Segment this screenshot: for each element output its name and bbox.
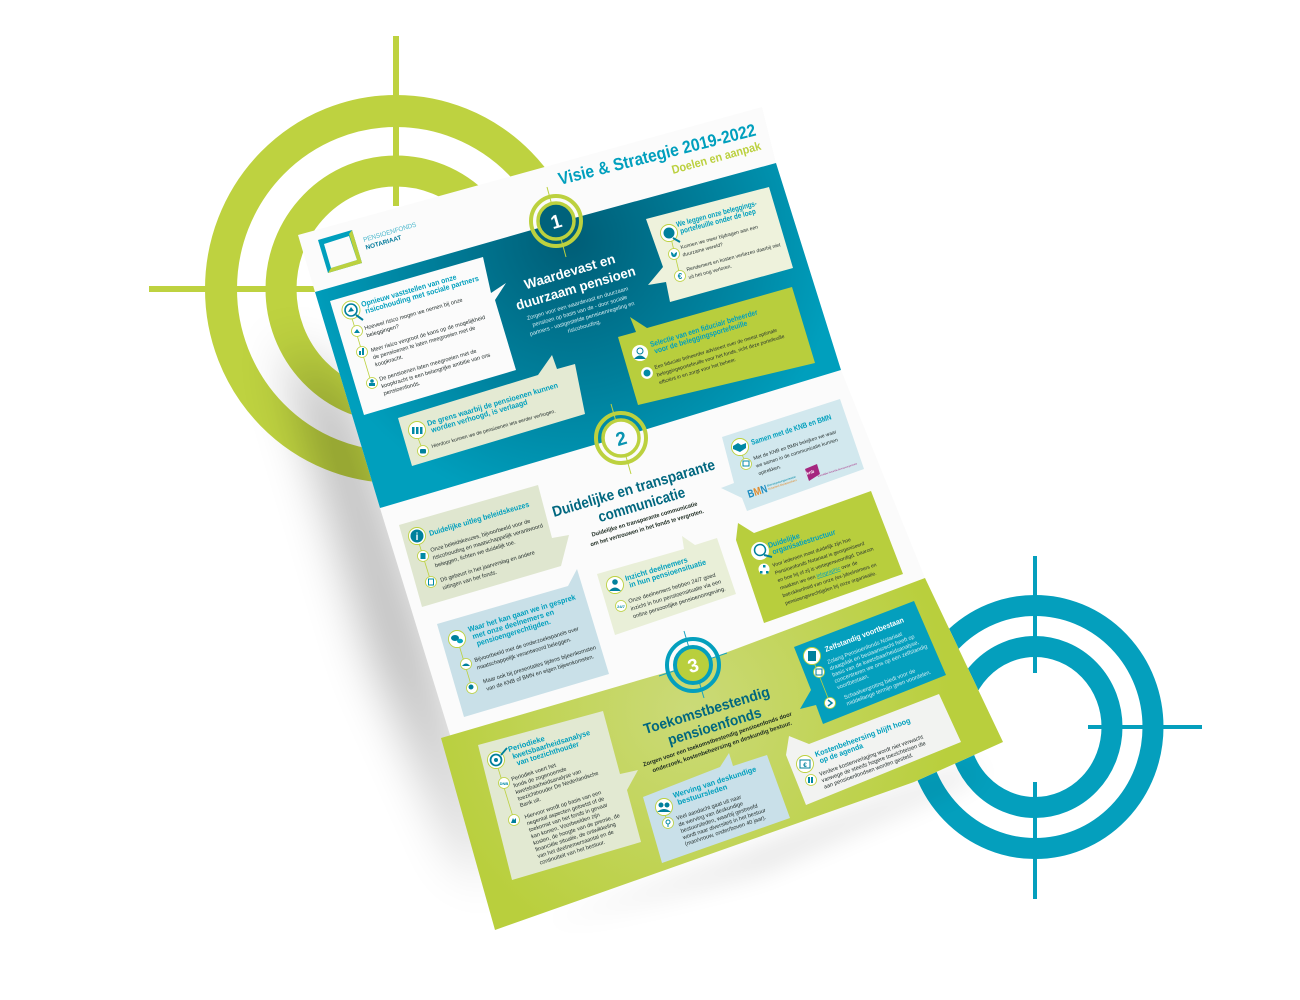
icon: org chart [758,564,770,574]
text: Voor iedereen moet duidelijk zijn hoe [772,537,852,569]
heading: kwetsbaarheidsanalyse [511,728,591,761]
text: Veel aandacht gaat uit naar [676,795,742,822]
logo: KNB [805,462,858,481]
text: bestuursleden, waarbij gestreefd [680,803,759,835]
heading: Werving van deskundige [672,764,757,800]
text: Maar ook bij presentaties tijdens bijeenkomsten [482,645,597,685]
icon: clipboard [814,666,824,678]
icon: DNB [498,778,510,788]
heading: Duidelijke uitleg beleidskeuzes [428,500,530,538]
text: efficiënt in en zorgt voor het beheer. [659,357,737,386]
panel: kostenbeheersing [786,694,961,805]
icon: info [408,528,426,544]
heading: Periodieke [507,734,546,754]
logo: PENSIOENFONDS [363,221,418,244]
heading: van toezichthouder [515,739,580,767]
section 1 intro: risicohouding. [567,319,602,335]
heading: Selectie van een fiduciair beheerder [649,308,759,349]
text: draagvlak en bestaansrecht heeft op [829,634,916,672]
logo: BMN: BMN [746,483,769,501]
icon: leaf [668,248,680,260]
icon: adviser [632,344,648,362]
text: aan pensioenfondsen worden gesteld. [823,753,915,791]
section band: green [441,578,1003,930]
logo: BMN [746,473,799,501]
icon: gender [662,818,674,828]
text: betrokkenheid van onze (ex-)deelnemers en [782,562,878,599]
panel: beleidskeuzes [399,485,569,607]
section 1 intro: pensioen op basis van de - door sociale [532,295,628,329]
icon: report [426,576,436,588]
heading: bestuursleden [676,782,729,807]
heading: De grens waarbij de pensioenen kunnen [426,381,559,428]
icon: euro [674,270,686,282]
heading: Inzicht deelnemers [624,555,689,583]
text: (man/vrouw, onder/boven 40 jaar). [684,815,767,848]
heading: Opnieuw vaststellen van onze [360,272,458,309]
target badge 2: 2 [613,428,629,451]
heading: Waar het kan gaan we in gesprek [467,592,577,634]
text: Hiervoor wordt op basis van een [524,790,602,821]
list: koopkracht is een belangrijke ambitie van ons [381,352,491,390]
text [511,749,627,867]
text: maakten we een infographic over de [779,560,859,592]
text: Onze deelnemers hebben 24/7 goed [628,573,716,605]
text: Hierdoor kunnen we de pensioenen iets eerder verhogen. [431,409,556,450]
text: middellange termijn geen voordelen. [846,669,933,708]
list: pensioenfonds. [383,381,421,397]
panel: inzicht deelnemers [597,536,736,635]
icon: target magnifier [488,748,507,768]
text [628,571,727,620]
heading: Zelfstandig voortbestaan [823,615,905,654]
heading [507,720,593,769]
icon: handshake [732,438,748,456]
target badge 1 [531,187,581,257]
heading: portefeuille onder de loep [679,207,757,236]
logo: BMN: Notarieel Medewerkers [768,478,798,491]
heading: pensioengerechtigden. [475,617,552,648]
icon: person [366,378,378,388]
panel: organisatiestructuur [736,491,903,623]
list: Hoeveel risico mogen we nemen bij onze [364,298,463,332]
paper sheet [298,107,1003,930]
heading: risicohouding met sociale partners [364,274,480,316]
icon: wallet [418,446,428,456]
text: Periodiek voert het [511,763,557,783]
text: van de KNB of BMN en eigen bijeenkomsten. [486,654,595,693]
target badge 2 [596,404,646,474]
background target: green [149,36,571,467]
section 3 intro: Zorgen voor een toekomstbestendig pensioenfonds door [642,711,794,768]
icon: group [460,658,472,670]
text: kan komen. Voorbeelden zijn [530,812,601,840]
heading: Duidelijke [767,531,801,550]
text: financiële situatie, de ontwikkeling [535,822,617,853]
text: wordt naar diversiteit in het bestuur [681,808,767,842]
list: Rendement en kosten verliezen daarbij niet [686,242,782,273]
panel: grens [398,355,585,466]
icon: arrow [824,698,836,708]
icon: DNB: DNB [500,781,508,786]
heading: We leggen onze beleggings- [675,199,758,229]
list: uit het oog verloren. [688,264,733,281]
text: kwetsbaarheidsanalyse van [515,769,582,796]
logo: NOTARIAAT [365,234,403,252]
icon: meeting [466,682,478,694]
icon: people [656,798,672,816]
icon: magnifier group [752,542,772,560]
text: en hoe hij of zij is vertegenwoordigd. Daarom [777,546,874,584]
text: we samen in de communicatie kunnen [755,437,839,470]
section 3 intro: onderzoek, kostenbeheersing en deskundig bestuur. [652,721,793,774]
heading: met onze deelnemers en [471,607,555,641]
text: Met de KNB en BMN bekijken we waar [753,429,838,462]
section 1 intro [525,286,638,345]
icon: chat [740,458,752,470]
text [772,531,882,607]
background target: blue [917,556,1202,899]
icon: 24/7: 24/7 [617,604,626,609]
text: Onze beleidskeuzes, bijvoorbeeld voor de [430,519,531,554]
list: koopkracht. [375,354,404,368]
heading: organisatiestructuur [771,527,837,556]
list: Kunnen we meer bijdragen aan een [680,224,759,251]
target badge 3: 3 [685,655,701,678]
icon: checks [508,814,520,826]
logo: KNB: knb [806,469,815,476]
icon: calendar euro: € [803,762,807,769]
text: toezichthouder De Nederlandsche [517,771,599,803]
icon: info: i [416,532,419,543]
text: optrekken. [758,464,782,477]
icon: calendar euro [796,756,814,772]
section 1 heading: duurzaam pensioen [514,263,637,313]
heading: Samen met de KNB en BMN [750,412,833,447]
icon: columns [408,422,426,438]
text: fonds de zogenoemde [513,767,567,789]
logo: KNB: Koninklijke Notariële Beroepsorganisatie [817,462,858,478]
section 2 heading: communicatie [596,484,687,526]
subtitle: Doelen en aanpak [670,139,763,177]
text: Dit gebeurt in het jaarverslag en andere [440,550,536,584]
list [364,293,499,397]
section 2 heading [550,457,722,538]
icon: bars [356,346,368,358]
logo: BMN: Beroepsorganisatie [767,474,797,488]
text: Verdere kostenverlaging wordt niet verwacht [819,734,925,778]
text: Bank uit. [519,797,542,809]
text [675,789,769,848]
text [474,623,599,694]
icon: euro: € [678,272,683,281]
target badge 3 [659,631,727,698]
text [753,429,843,477]
section 2 heading: Duidelijke en transparante [550,457,717,521]
section 1 intro: Zorgen voor een waardevast en duurzaam [526,286,629,322]
list: de pensioenen te laten meegroeien met de [372,326,476,361]
panel: zelfstandig voortbestaan [794,601,946,724]
panel: beleggingsportefeuille [646,187,793,302]
text: van het deelnemersaantal en de [537,830,615,860]
icon: columns [806,774,816,786]
list: De pensioenen laten meegroeien met de [379,349,477,383]
section 3 heading: Toekomstbestendig [642,684,772,738]
text [430,516,553,592]
text: beleggingsportefeuille voor het fonds, richt deze portefeuille [656,334,786,379]
section 1 heading: Waardevast en [523,251,617,292]
text: basis van de kwetsbaarheidsanalyse, [831,640,921,679]
text: voortbestaan. [836,673,871,691]
panel: in gesprek [437,569,609,717]
title: Visie & Strategie 2019-2022 [556,120,758,189]
logo [318,221,420,273]
icon: participant [606,576,624,594]
section 2 intro: om het vertrouwen in het fonds te vergroten. [590,509,705,548]
list: Meer risico vergroot de kans op de mogelijkheid [370,315,486,354]
icon: magnifier [660,224,680,242]
text: beleggen, lichten we duidelijk toe. [434,540,517,569]
text: Pensioenfonds Notariaat is georganiseerd [774,541,865,576]
heading: op de agenda [818,741,865,765]
list: duurzame wereld? [682,242,724,258]
heading: worden verhoogd, is verlaagd [429,397,529,435]
text: Schaalvergroting biedt voor de [843,668,916,701]
text: continuïteit van het bestuur. [539,840,606,867]
panel: KNB en BMN [721,399,864,511]
panel: fiduciair beheerder [618,287,815,405]
section 1 intro: partners - vastgestelde pensioenregeling en [529,301,635,338]
text: concentreren we ons op een zelfstandig [834,644,928,685]
icon: document [418,550,428,562]
icon: globe [642,368,652,378]
text: online persoonlijke pensioenomgeving. [633,586,727,620]
text [827,625,937,709]
panel: werving [643,753,790,863]
list: beleggingen? [366,324,400,339]
icon: speech bubbles [448,630,466,648]
text: uitingen van het fonds. [442,570,498,592]
heading: in hun pensioensituatie [628,558,707,590]
text: kosten, de hoogte van de premie, de [533,813,621,847]
section 3 heading: pensioenfonds [666,705,764,749]
text: toekomst van het fonds in gevaar [528,803,609,834]
icon: graph [352,326,362,336]
text: Bijvoorbeeld met de onderzoekspanels over [474,626,580,664]
text: negental aspecten getoetst of de [526,796,605,827]
heading: voor de beleggingsportefeuille [653,319,748,356]
text: vanwege de steeds hogere toezichteisen die [821,741,927,784]
panel: kwetsbaarheidsanalyse [478,711,641,880]
heading: Kostenbeheersing blijft hoog [814,716,912,759]
text: de werving van deskundige [678,801,744,828]
text: maatschappelijk verantwoord beleggen. [476,637,573,672]
text: risicohouding en maatschappelijk verantwoord [432,523,544,562]
text: Een fiduciair beheerder adviseert over de meest optimale [654,328,778,371]
list [680,220,784,281]
section 2 intro: Duidelijke en transparante communicatie [591,501,699,539]
icon: magnifier [342,301,363,320]
target badge 1: 1 [548,211,565,234]
text: pensioengerechtigden bij onze organisatie. [784,571,877,607]
text: Zolang Pensioenfonds Notariaat [827,631,904,666]
section band: teal [315,163,841,508]
text: inzicht in hun pensioensituatie via een [630,579,722,613]
paper shadow [285,340,985,925]
panel: risicohouding [330,257,516,415]
icon: book [804,648,820,664]
